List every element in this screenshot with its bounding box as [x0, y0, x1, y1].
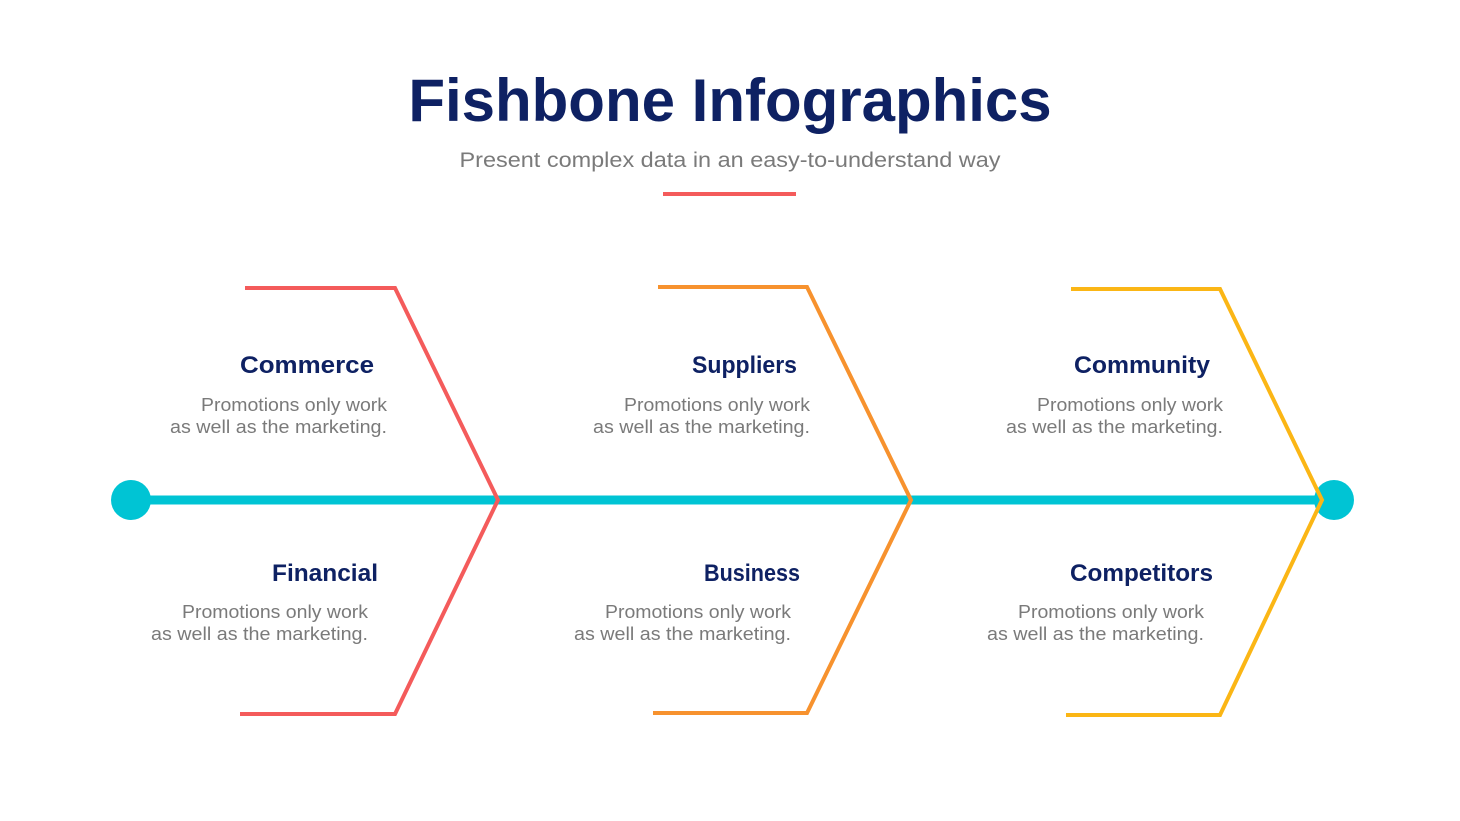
text block: Suppliers [593, 352, 811, 437]
text block: Competitors [987, 560, 1213, 644]
text block: Commerce: as well as the marketing. [170, 417, 387, 437]
text block: Suppliers: Promotions only work [624, 395, 811, 415]
title: Fishbone Infographics [408, 67, 1052, 134]
text block: Competitors: Competitors [1070, 560, 1213, 587]
bone: red [240, 288, 498, 714]
text block: Community: Promotions only work [1037, 395, 1224, 415]
subtitle: Present complex data in an easy-to-understand way [460, 149, 1001, 172]
text block: Commerce: Commerce [240, 352, 374, 379]
text block: Business: Business [704, 560, 800, 587]
text block: Commerce [170, 352, 388, 437]
text block: Financial: Promotions only work [182, 602, 369, 622]
bone: yellow [1066, 289, 1322, 715]
text block: Business: as well as the marketing. [574, 624, 791, 644]
text block: Competitors: as well as the marketing. [987, 624, 1204, 644]
text block: Community: as well as the marketing. [1006, 417, 1223, 437]
text block: Commerce: Promotions only work [201, 395, 388, 415]
text block: Business [574, 560, 800, 644]
text block: Financial [151, 560, 378, 644]
text block: Business: Promotions only work [605, 602, 792, 622]
text block: Suppliers: Suppliers [692, 352, 797, 379]
text block: Competitors: Promotions only work [1018, 602, 1205, 622]
text block: Financial: Financial [272, 560, 378, 587]
text block: Community: Community [1074, 352, 1211, 379]
bone: orange [653, 287, 911, 713]
text block: Financial: as well as the marketing. [151, 624, 368, 644]
text block: Suppliers: as well as the marketing. [593, 417, 810, 437]
text block: Community [1006, 352, 1224, 437]
spine [111, 480, 1354, 520]
